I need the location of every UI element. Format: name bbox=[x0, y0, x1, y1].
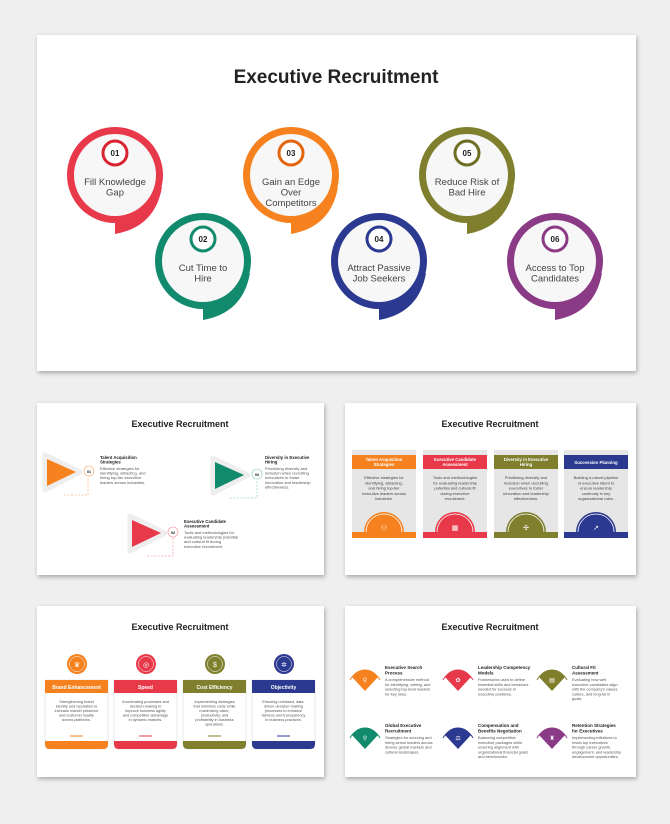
bubble 06 bbox=[507, 213, 603, 320]
item: Cultural Fit Assessment: ▤ bbox=[549, 678, 555, 684]
card: Objectivity: in business practices. bbox=[265, 718, 302, 722]
item 02: 02 bbox=[171, 531, 175, 535]
title: Executive Recruitment bbox=[441, 419, 539, 429]
card 1: executive leaders across bbox=[362, 491, 406, 496]
card: Objectivity: driven decision-making bbox=[264, 704, 303, 708]
item: Executive Search Process: Executive Search bbox=[385, 665, 423, 670]
panel: benefits slide bbox=[37, 606, 324, 777]
item: Executive Search Process: Process bbox=[385, 670, 403, 675]
card: Speed bbox=[114, 654, 177, 749]
item 03: 03 bbox=[255, 473, 259, 477]
card 1: industries. bbox=[375, 496, 393, 501]
panel: cards slide bbox=[345, 403, 636, 575]
card: Cost Efficiency: maximizing value, bbox=[199, 709, 230, 713]
item 02: Tools and methodologies for bbox=[184, 530, 235, 535]
bubble 03: Competitors bbox=[265, 198, 317, 209]
card 4: Building a robust pipeline bbox=[574, 475, 619, 480]
item 02: and cultural fit during bbox=[184, 539, 221, 544]
card: Brand Enhancement: increase market presence bbox=[55, 709, 98, 713]
item 03: Hiring bbox=[265, 460, 278, 465]
item: Cultural Fit Assessment bbox=[537, 665, 618, 701]
item: Cultural Fit Assessment: culture, and long-term bbox=[572, 691, 610, 696]
card 4: ensure leadership bbox=[580, 486, 613, 491]
item 03: innovation and leadership bbox=[265, 480, 311, 485]
item 03: executives to foster bbox=[265, 475, 300, 480]
card 3: effectiveness. bbox=[514, 496, 538, 501]
card: Objectivity: Objectivity bbox=[271, 685, 296, 691]
card 3 bbox=[494, 450, 558, 538]
item: Leadership Competency Models: Frameworks used to define bbox=[478, 677, 525, 682]
card: Brand Enhancement: identity and reputation to bbox=[56, 704, 97, 708]
card 2: recruitment. bbox=[444, 496, 466, 501]
item 02: executive recruitment. bbox=[184, 544, 223, 549]
card 1: identifying, attracting, bbox=[365, 480, 403, 485]
card 4: Succession Planning bbox=[574, 460, 618, 465]
item: Leadership Competency Models: essential skills and behaviors bbox=[478, 682, 528, 687]
card: Brand Enhancement: Brand Enhancement bbox=[52, 685, 101, 691]
bubble 06: Candidates bbox=[531, 274, 579, 284]
card: Brand Enhancement: across platforms. bbox=[62, 718, 91, 722]
bubble 04: Job Seekers bbox=[353, 274, 406, 284]
item: Retention Strategies for Executives: development opportunities. bbox=[572, 754, 619, 759]
card 2: during executive bbox=[440, 491, 470, 496]
card: Cost Efficiency: operations. bbox=[205, 722, 224, 726]
item: Cultural Fit Assessment: Evaluating how well bbox=[572, 677, 606, 682]
bubble 01 bbox=[67, 127, 163, 234]
card: Brand Enhancement bbox=[45, 654, 108, 749]
item: Executive Search Process: ⚲ bbox=[363, 677, 367, 684]
item: Compensation and Benefits Negotiation: and benchmarks. bbox=[478, 754, 508, 759]
item 02: Executive Candidate bbox=[184, 519, 227, 524]
bubble 03: Gain an Edge bbox=[262, 177, 320, 188]
item 01: Talent Acquisition bbox=[100, 455, 137, 460]
item 02: evaluating leadership potential bbox=[184, 535, 238, 540]
card 4: continuity in key bbox=[582, 491, 610, 496]
card 2: for evaluating leadership bbox=[433, 480, 478, 485]
item: Executive Search Process: A comprehensive method bbox=[385, 677, 429, 682]
item: Executive Search Process: selecting top-level leaders bbox=[385, 687, 430, 692]
item: Compensation and Benefits Negotiation: ⚖ bbox=[455, 735, 461, 742]
card: Objectivity: processes to enhance bbox=[265, 709, 302, 713]
item: Leadership Competency Models: ✿ bbox=[455, 677, 461, 684]
item 01: leaders across industries. bbox=[100, 480, 145, 485]
item: Leadership Competency Models: Models bbox=[478, 670, 494, 675]
item: Compensation and Benefits Negotiation: ensuring alignment with bbox=[478, 745, 519, 750]
card 4: organizational roles. bbox=[578, 496, 614, 501]
item: Global Executive Recruitment: diverse global markets and bbox=[385, 745, 432, 750]
item: Retention Strategies for Executives: for Executives bbox=[572, 728, 603, 733]
card 2 bbox=[423, 450, 487, 538]
bubble 06: 06 bbox=[551, 235, 560, 244]
bubble 04: 04 bbox=[375, 235, 384, 244]
card 3: Hiring bbox=[520, 462, 533, 467]
item: Retention Strategies for Executives: retain top executives bbox=[572, 740, 608, 745]
card 3: inclusion when recruiting bbox=[504, 480, 548, 485]
item 03: inclusion when recruiting bbox=[265, 471, 309, 476]
card: Objectivity: Ensuring unbiased, data- bbox=[262, 700, 305, 704]
bubble 05: 05 bbox=[463, 149, 472, 158]
card: Cost Efficiency: productivity, and bbox=[201, 714, 228, 718]
item: Leadership Competency Models: executive positions. bbox=[478, 691, 512, 696]
card: Cost Efficiency: $ bbox=[213, 662, 217, 669]
bubble 02: Hire bbox=[194, 274, 212, 284]
bubble 01: 01 bbox=[111, 149, 120, 158]
card 1: Talent Acquisition bbox=[366, 457, 403, 462]
item: Compensation and Benefits Negotiation bbox=[443, 723, 528, 759]
card 1: Effective strategies for bbox=[364, 475, 404, 480]
item: Cultural Fit Assessment: goals. bbox=[572, 696, 582, 701]
bubble 02 bbox=[155, 213, 251, 320]
item 01: hiring top-tier executive bbox=[100, 475, 142, 480]
item: Executive Search Process: for key roles. bbox=[385, 691, 407, 696]
bubble 05 bbox=[419, 127, 515, 234]
item: Leadership Competency Models: needed for success in bbox=[478, 687, 516, 692]
item: Executive Search Process bbox=[350, 665, 430, 696]
card: Cost Efficiency: profitability in business bbox=[195, 718, 234, 722]
item 03: Prioritizing diversity and bbox=[265, 466, 307, 471]
card 2: Assessment bbox=[442, 462, 468, 467]
item: Leadership Competency Models bbox=[443, 665, 531, 696]
item: Compensation and Benefits Negotiation: Compensation and bbox=[478, 723, 519, 728]
item 02 bbox=[130, 516, 238, 556]
item: Global Executive Recruitment: Global Executive bbox=[385, 723, 422, 728]
item: Retention Strategies for Executives: Retention Strategies bbox=[572, 723, 616, 728]
item: Global Executive Recruitment: cultural landscapes. bbox=[385, 749, 419, 754]
card 4 bbox=[564, 450, 628, 538]
item: Compensation and Benefits Negotiation: executive packages while bbox=[478, 740, 522, 745]
item: Retention Strategies for Executives: engagement, and leadership bbox=[572, 749, 621, 754]
bubble 05: Bad Hire bbox=[449, 188, 485, 198]
card: Cost Efficiency: Cost Efficiency bbox=[196, 685, 233, 691]
title: Executive Recruitment bbox=[131, 419, 229, 429]
card: Speed: decision-making to bbox=[130, 704, 161, 708]
item: Retention Strategies for Executives: ♜ bbox=[549, 735, 555, 742]
item: Cultural Fit Assessment: Assessment bbox=[572, 670, 599, 675]
bubble 06: Access to Top bbox=[526, 263, 584, 274]
card: Brand Enhancement: ♛ bbox=[74, 661, 80, 669]
card: Objectivity: ✲ bbox=[281, 661, 287, 669]
bubble 02: 02 bbox=[199, 235, 208, 244]
item 02: Assessment bbox=[184, 524, 210, 529]
card: Speed: improve business agility bbox=[125, 709, 166, 713]
item 01 bbox=[45, 455, 146, 495]
item: Compensation and Benefits Negotiation: Balancing competitive bbox=[478, 735, 516, 740]
card 3: Prioritizing diversity and bbox=[505, 475, 547, 480]
bubble 01: Gap bbox=[106, 188, 124, 198]
card 1 bbox=[352, 450, 416, 538]
card 3: executives to foster bbox=[509, 486, 544, 491]
card: Cost Efficiency: Implementing strategies bbox=[194, 700, 235, 704]
item: Leadership Competency Models: Leadership Competency bbox=[478, 665, 531, 670]
card 2: ▦ bbox=[452, 525, 458, 532]
card: Objectivity: fairness and transparency bbox=[262, 714, 305, 718]
item 01: 01 bbox=[87, 470, 91, 474]
panel: main slide bbox=[37, 35, 636, 371]
bubble 04: Attract Passive bbox=[347, 263, 411, 274]
card: Brand Enhancement: Strengthening brand bbox=[59, 700, 94, 704]
title: Executive Recruitment bbox=[234, 67, 439, 88]
bubble 02: Cut Time to bbox=[179, 263, 227, 274]
item: Cultural Fit Assessment: with the company's values, bbox=[572, 687, 618, 692]
item 03: effectiveness. bbox=[265, 484, 289, 489]
card: Speed: in dynamic markets. bbox=[129, 718, 162, 722]
bubble 01: Fill Knowledge bbox=[84, 177, 146, 188]
bubble 04 bbox=[331, 213, 427, 320]
card: Brand Enhancement: and customer loyalty bbox=[59, 714, 94, 718]
item 03: Diversity in Executive bbox=[265, 455, 310, 460]
item: Retention Strategies for Executives bbox=[537, 723, 621, 759]
bubble 03: 03 bbox=[287, 149, 296, 158]
bubble 03 bbox=[243, 127, 339, 234]
card: Speed: and competitive advantage bbox=[123, 714, 168, 718]
item 01: Effective strategies for bbox=[100, 466, 140, 471]
card: Speed: Speed bbox=[138, 685, 153, 691]
item: Cultural Fit Assessment: executive candidates align bbox=[572, 682, 618, 687]
card 3: Diversity in Executive bbox=[504, 457, 549, 462]
item: Retention Strategies for Executives: Implementing initiatives to bbox=[572, 735, 617, 740]
title: Executive Recruitment bbox=[131, 622, 229, 632]
bubble 03: Over bbox=[281, 188, 301, 198]
item: Compensation and Benefits Negotiation: organizational financial goals bbox=[478, 749, 528, 754]
item 03 bbox=[213, 455, 311, 498]
card 4: of executive talent to bbox=[578, 480, 615, 485]
item: Global Executive Recruitment: hiring senior leaders across bbox=[385, 740, 433, 745]
item: Cultural Fit Assessment: Cultural Fit bbox=[572, 665, 596, 670]
item: Global Executive Recruitment bbox=[350, 723, 433, 754]
card: Speed: ◎ bbox=[143, 662, 149, 669]
item: Compensation and Benefits Negotiation: Benefits Negotiation bbox=[478, 728, 522, 733]
item: Executive Search Process: for identifying, vetting, and bbox=[385, 682, 430, 687]
item 01: Strategies bbox=[100, 460, 121, 465]
card: Objectivity bbox=[252, 654, 315, 749]
card: Cost Efficiency: that minimize costs while bbox=[194, 704, 236, 708]
card 1: Strategies bbox=[374, 462, 395, 467]
item: Global Executive Recruitment: Recruitment bbox=[385, 728, 412, 733]
card 3: innovation and leadership bbox=[503, 491, 550, 496]
card 2: Executive Candidate bbox=[434, 457, 477, 462]
card: Cost Efficiency bbox=[183, 654, 246, 749]
card 2: Tools and methodologies bbox=[433, 475, 477, 480]
card 1: ⚇ bbox=[381, 524, 387, 532]
card: Speed: Accelerating processes and bbox=[122, 700, 169, 704]
card 2: potential and cultural fit bbox=[434, 486, 476, 491]
card 1: and hiring top-tier bbox=[368, 486, 400, 491]
item 01: identifying, attracting, and bbox=[100, 471, 146, 476]
title: Executive Recruitment bbox=[441, 622, 539, 632]
card 4: ↗ bbox=[593, 525, 599, 532]
item: Global Executive Recruitment: ⚲ bbox=[363, 735, 367, 742]
panel: triangles slide bbox=[37, 403, 324, 575]
panel: fans slide bbox=[345, 606, 636, 777]
item: Global Executive Recruitment: Strategies for sourcing and bbox=[385, 735, 432, 740]
item: Retention Strategies for Executives: through career growth, bbox=[572, 745, 611, 750]
card 3: ✣ bbox=[523, 524, 529, 532]
bubble 05: Reduce Risk of bbox=[435, 177, 500, 188]
